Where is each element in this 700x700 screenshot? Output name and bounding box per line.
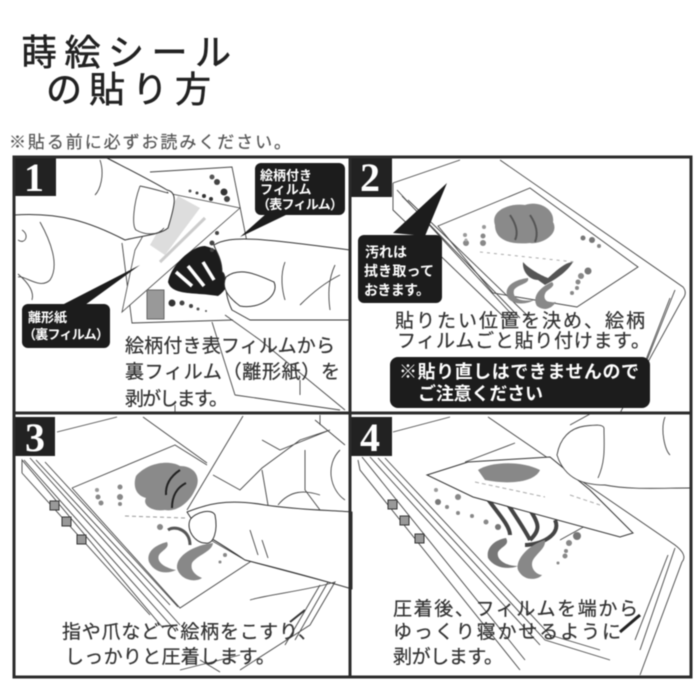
step 4 text: 圧着後、フィルムを端から [393, 598, 638, 620]
callout: release paper [22, 265, 140, 348]
step number 4 [351, 415, 392, 460]
step number 3 [15, 415, 55, 460]
callout: release paper: （裏フィルム） [23, 327, 109, 342]
title: の貼り方 [46, 69, 211, 110]
step 3 text: 指や爪などで絵柄をこすり、 [62, 621, 317, 643]
step 2 text: 貼りたい位置を決め、絵柄 [395, 310, 645, 332]
callout: wipe off dirt [358, 183, 447, 303]
warning banner: ※貼り直しはできませんので [399, 362, 639, 382]
frame lines [14, 157, 691, 677]
step 4 text: 剥がします。 [393, 646, 503, 668]
step number 1: 1 [24, 155, 44, 200]
step 4 text [393, 598, 638, 668]
warning banner: ご注意ください [418, 383, 543, 404]
callout: film with design: 絵柄付き [260, 168, 312, 183]
title: 蒔絵シール [21, 32, 231, 73]
step number 1 [14, 155, 56, 200]
step 2 text: フィルムごと貼り付けます。 [397, 330, 650, 352]
step 1 text: 裏フィルム（離形紙）を [125, 361, 340, 383]
step number 4: 4 [360, 415, 380, 460]
panel: step 4 [351, 412, 692, 675]
callout: release paper: 離形紙 [28, 310, 67, 325]
callout: film with design [240, 163, 345, 237]
step number 2: 2 [360, 155, 380, 200]
warning banner [390, 357, 650, 408]
callout: film with design: （表フィルム） [257, 197, 343, 212]
step 1 text [125, 335, 340, 410]
step number 3: 3 [25, 415, 45, 460]
callout: wipe off dirt: おきます。 [364, 282, 430, 298]
panel: step 3 [15, 412, 352, 672]
title [21, 32, 231, 110]
step 3 text [62, 621, 317, 668]
step 1 text: 絵柄付き表フィルムから [125, 335, 335, 357]
step number 2 [351, 155, 392, 200]
callout: film with design: フィルム [260, 182, 311, 197]
illustration: peeling film [358, 412, 692, 675]
illustration: rubbing film [22, 412, 352, 672]
step 1 text: 剥がします。 [125, 388, 228, 410]
step 2 text [395, 310, 650, 352]
step 3 text: しっかりと圧着します。 [65, 646, 275, 668]
panel: step 2 [351, 155, 685, 413]
callout: wipe off dirt: 汚れは [365, 244, 407, 260]
callout: wipe off dirt: 拭き取って [364, 263, 434, 279]
illustration: phone with design [393, 160, 685, 413]
notice text: ※貼る前に必ずお読みください。 [9, 133, 291, 152]
panel: step 1 [14, 155, 350, 412]
step 4 text: ゆっくり寝かせるように [393, 621, 621, 643]
illustration: film and hands [14, 157, 350, 412]
